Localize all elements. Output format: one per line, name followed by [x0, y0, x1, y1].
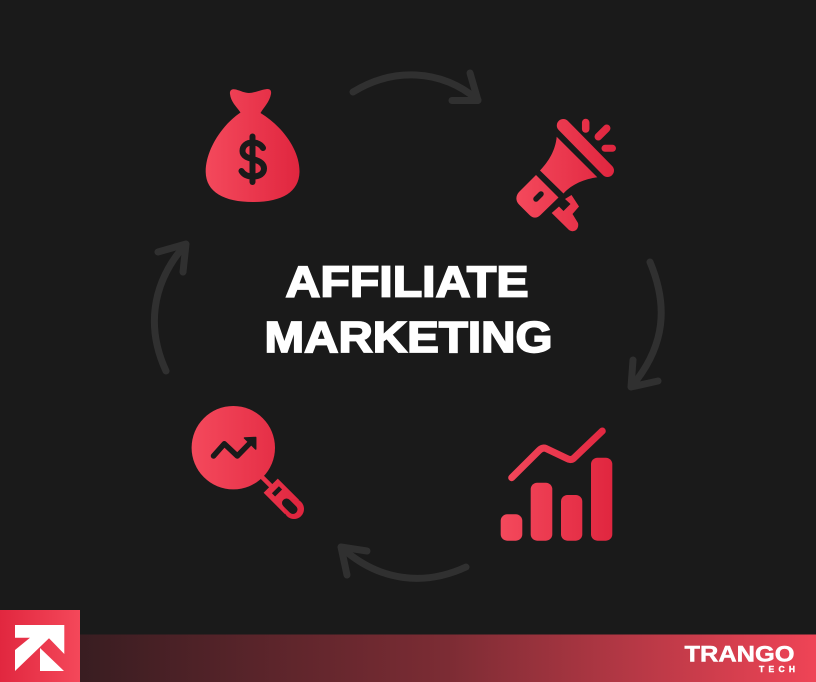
arrow: right	[631, 262, 661, 387]
icon: bar chart with trend line	[501, 431, 612, 541]
brand wordmark: TRANGO	[684, 642, 794, 666]
dollar sign	[242, 136, 264, 182]
title: AFFILIATE	[286, 258, 528, 307]
footer gradient bar	[80, 634, 816, 682]
brand wordmark	[684, 642, 795, 674]
title	[264, 258, 552, 362]
icon: magnifier with trend arrow	[192, 406, 304, 519]
arrow: left	[154, 244, 186, 371]
arrow: bottom	[341, 547, 466, 578]
logo square with arrow mark	[0, 610, 80, 682]
title: MARKETING	[264, 313, 552, 362]
arrow: top	[353, 73, 478, 100]
icon: money bag	[206, 89, 300, 202]
icon: megaphone	[516, 122, 612, 231]
brand wordmark: TECH	[759, 664, 795, 674]
